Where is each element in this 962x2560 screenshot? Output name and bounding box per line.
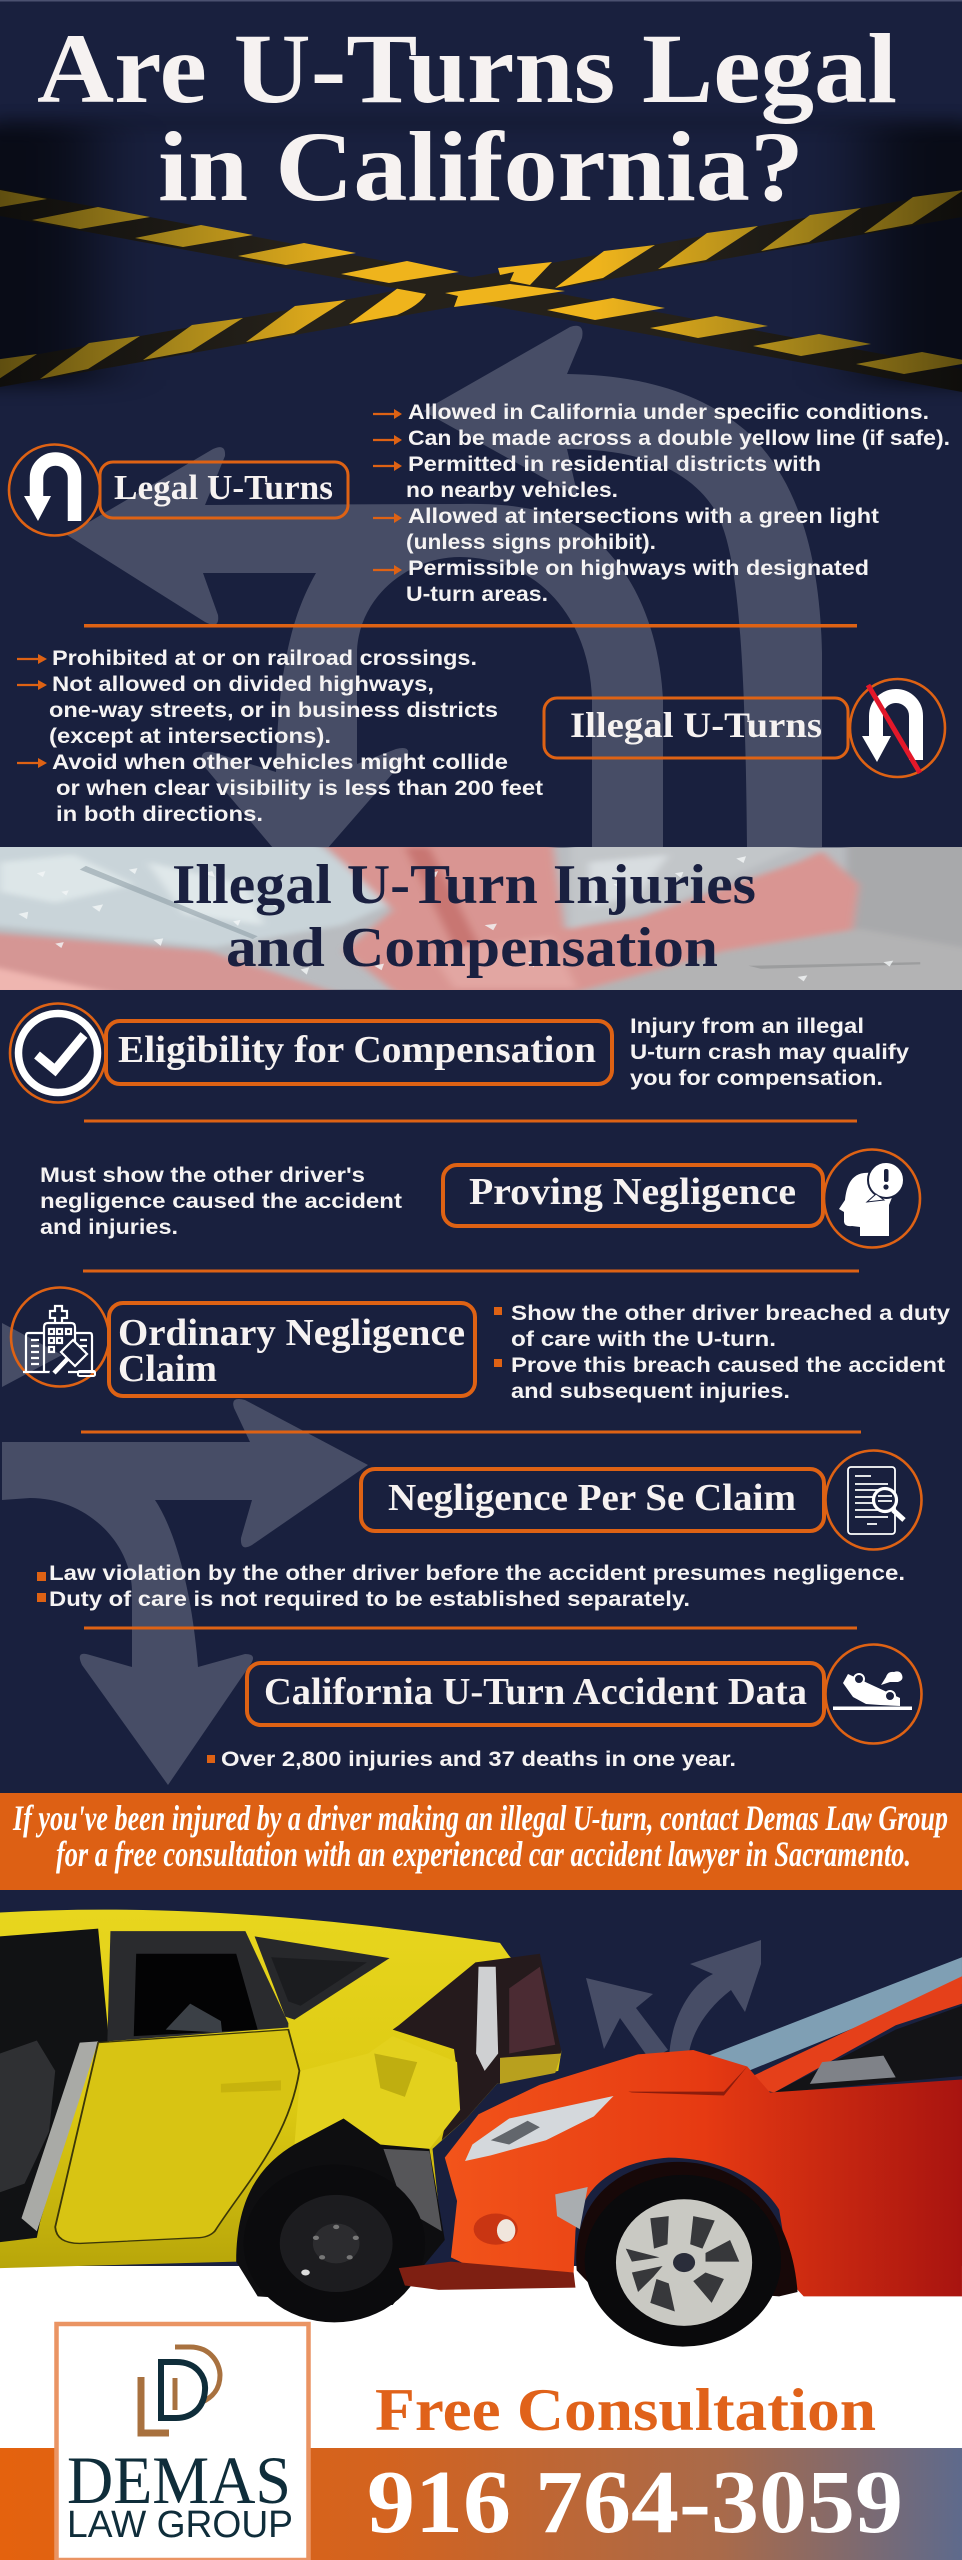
panel: illegal u-turns bbox=[17, 647, 945, 826]
icon: check mark bbox=[10, 1004, 106, 1102]
panel: eligibility for compensation bbox=[10, 1004, 909, 1102]
title: Are U-Turns Legal bbox=[37, 13, 897, 124]
heading: negligence per se claim bbox=[361, 1469, 824, 1531]
section banner: crash photo with heading bbox=[0, 840, 962, 995]
footer bar with gradient bbox=[0, 2448, 962, 2560]
icon: u-turn arrow bbox=[9, 444, 100, 536]
list: legal conditions: (unless signs prohibit). bbox=[406, 531, 656, 554]
heading: california u-turn accident data: California U-Turn Accident Data bbox=[264, 1671, 807, 1713]
list: legal conditions: Allowed at intersections with a green light bbox=[408, 505, 879, 528]
text: negligence description bbox=[40, 1164, 402, 1239]
list: illegal conditions: one-way streets, or in business districts bbox=[49, 699, 498, 722]
caution tape crossed bands bbox=[0, 189, 962, 397]
callout: phone number: 916 764-3059 bbox=[367, 2453, 903, 2552]
list: illegal conditions: or when clear visibility is less than 200 feet bbox=[56, 777, 543, 800]
list: legal conditions: no nearby vehicles. bbox=[406, 479, 618, 502]
photo: shattered windshield and red hood bbox=[0, 840, 962, 995]
callout: free consultation: Free Consultation bbox=[375, 2377, 876, 2443]
list: legal conditions: Permitted in residential districts with bbox=[408, 453, 821, 476]
list: ordinary negligence requirements: Show the other driver breached a duty bbox=[511, 1302, 950, 1325]
list: legal conditions: Can be made across a double yellow line (if safe). bbox=[408, 427, 950, 450]
panel: legal u-turns bbox=[9, 401, 950, 606]
list: legal conditions bbox=[373, 401, 950, 606]
list: legal conditions: Allowed in California under specific conditions. bbox=[408, 401, 929, 424]
text: negligence description: negligence caused the accident bbox=[40, 1190, 402, 1213]
list: illegal conditions: Prohibited at or on railroad crossings. bbox=[52, 647, 477, 670]
background: white lower area bbox=[0, 2266, 962, 2560]
list: illegal conditions bbox=[17, 647, 543, 826]
list: ordinary negligence requirements: of care with the U-turn. bbox=[511, 1328, 776, 1351]
icon: overturned car bbox=[826, 1644, 922, 1744]
list: negligence per se points bbox=[37, 1562, 905, 1611]
title: in California? bbox=[158, 111, 804, 222]
heading: illegal u-turns: Illegal U-Turns bbox=[570, 705, 822, 745]
panel: ordinary negligence claim bbox=[11, 1288, 950, 1403]
list: negligence per se points: Law violation by the other driver before the accident presumes negligence. bbox=[49, 1562, 905, 1585]
heading: legal u-turns: Legal U-Turns bbox=[114, 468, 333, 507]
hero dark vignette bbox=[0, 116, 962, 386]
heading: illegal u-turns bbox=[544, 698, 848, 758]
heading: illegal u-turn injuries and compensation: and Compensation bbox=[226, 917, 718, 979]
heading: ordinary negligence claim: Ordinary Negligence bbox=[118, 1312, 465, 1354]
callout: orange consultation banner bbox=[0, 1793, 962, 1890]
red car bbox=[399, 1957, 962, 2347]
text: negligence description: and injuries. bbox=[40, 1216, 178, 1239]
text: eligibility description: Injury from an illegal bbox=[630, 1015, 864, 1038]
icon: hospital and gavel bbox=[11, 1288, 109, 1386]
text: eligibility description bbox=[630, 1015, 909, 1090]
logo: demas law group bbox=[56, 2324, 308, 2560]
logo mark: letter shapes bbox=[141, 2347, 220, 2433]
heading: proving negligence: Proving Negligence bbox=[469, 1171, 796, 1213]
heading: ordinary negligence claim bbox=[109, 1303, 475, 1396]
list: legal conditions: U-turn areas. bbox=[406, 583, 548, 606]
list: ordinary negligence requirements bbox=[494, 1302, 950, 1403]
title bbox=[37, 13, 897, 222]
heading: california u-turn accident data bbox=[247, 1663, 824, 1725]
list: illegal conditions: Avoid when other vehicles might collide bbox=[52, 751, 508, 774]
panel: negligence per se claim bbox=[37, 1450, 922, 1611]
list: legal conditions: Permissible on highways with designated bbox=[408, 557, 869, 580]
list: illegal conditions: (except at intersections). bbox=[49, 725, 331, 748]
heading: proving negligence bbox=[443, 1165, 823, 1226]
text: eligibility description: U-turn crash may qualify bbox=[630, 1041, 909, 1064]
heading: eligibility for compensation: Eligibility for Compensation bbox=[118, 1029, 596, 1071]
text: eligibility description: you for compensation. bbox=[630, 1067, 883, 1090]
icon: head with alert bubble bbox=[824, 1150, 920, 1248]
list: illegal conditions: Not allowed on divided highways, bbox=[52, 673, 434, 696]
panel: california u-turn accident data bbox=[207, 1644, 922, 1771]
list: illegal conditions: in both directions. bbox=[56, 803, 263, 826]
text: negligence description: Must show the other driver's bbox=[40, 1164, 365, 1187]
heading: legal u-turns bbox=[100, 462, 348, 518]
background arrow: T-fork arrow right and down bbox=[2, 1323, 368, 1785]
heading: eligibility for compensation bbox=[106, 1021, 612, 1084]
logo: demas law group: DEMAS bbox=[67, 2442, 291, 2518]
illustration: crashed yellow and red cars bbox=[0, 1910, 962, 2347]
list: ordinary negligence requirements: and subsequent injuries. bbox=[511, 1380, 790, 1403]
icon: document with magnifier bbox=[826, 1450, 922, 1550]
list: ordinary negligence requirements: Prove this breach caused the accident bbox=[511, 1354, 945, 1377]
yellow car bbox=[0, 1910, 561, 2322]
heading: illegal u-turn injuries and compensation bbox=[172, 854, 756, 979]
text: accident statistic: Over 2,800 injuries and 37 deaths in one year. bbox=[221, 1748, 736, 1771]
panel: proving negligence bbox=[40, 1150, 920, 1248]
background arrow: small fork arrows bbox=[586, 1940, 761, 2060]
heading: illegal u-turn injuries and compensation: Illegal U-Turn Injuries bbox=[172, 854, 756, 916]
heading: negligence per se claim: Negligence Per Se Claim bbox=[388, 1477, 796, 1519]
icon: no u-turn sign bbox=[850, 679, 945, 777]
heading: ordinary negligence claim: Claim bbox=[118, 1348, 217, 1390]
list: negligence per se points: Duty of care is not required to be established separately. bbox=[49, 1588, 690, 1611]
background arrow: large left and U-turn arrows bbox=[67, 326, 822, 880]
logo: demas law group: LAW GROUP bbox=[67, 2504, 293, 2546]
